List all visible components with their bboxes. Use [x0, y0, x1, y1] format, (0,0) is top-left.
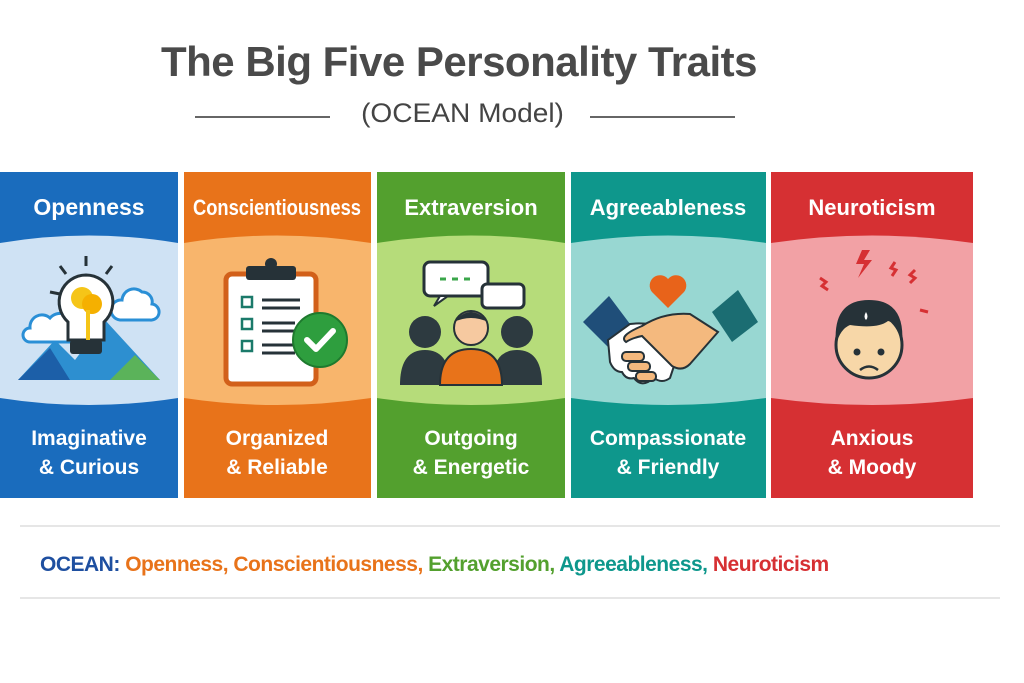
- OCEAN legend line: OCEAN: Openness, Conscientiousness, Extraversion, Agreeableness, Neuroticism: [40, 553, 829, 576]
- icon: worried face: [820, 250, 928, 378]
- panel: openness: Imaginative: [31, 427, 147, 450]
- panel: conscientiousness: [184, 172, 371, 498]
- panel: neuroticism: [771, 172, 973, 498]
- panel: openness: Openness: [33, 194, 145, 220]
- icon: handshake: [583, 275, 758, 383]
- icon: clipboard: [226, 258, 347, 384]
- panel: agreeableness: Agreeableness: [590, 195, 746, 220]
- panel: extraversion: Outgoing: [424, 427, 518, 450]
- panel: conscientiousness: & Reliable: [226, 456, 328, 479]
- panel: neuroticism: Neuroticism: [808, 195, 936, 220]
- panel: openness: & Curious: [39, 456, 139, 479]
- title: The Big Five Personality Traits: [161, 38, 757, 85]
- panel: agreeableness: & Friendly: [617, 456, 720, 479]
- panel: agreeableness: [571, 172, 766, 498]
- panel: extraversion: [377, 172, 565, 498]
- panel: neuroticism: Anxious: [831, 427, 913, 450]
- subtitle: (OCEAN Model): [361, 98, 564, 128]
- panel: conscientiousness: Organized: [226, 427, 328, 450]
- icon: people talking: [400, 262, 542, 385]
- panel: extraversion: & Energetic: [413, 456, 530, 479]
- panel: conscientiousness: Conscientiousness: [193, 195, 361, 220]
- panel: openness: [0, 172, 178, 498]
- panel: agreeableness: Compassionate: [590, 427, 746, 450]
- icon: lightbulb: [18, 256, 160, 380]
- panel: neuroticism: & Moody: [828, 456, 917, 479]
- panel: extraversion: Extraversion: [404, 195, 538, 220]
